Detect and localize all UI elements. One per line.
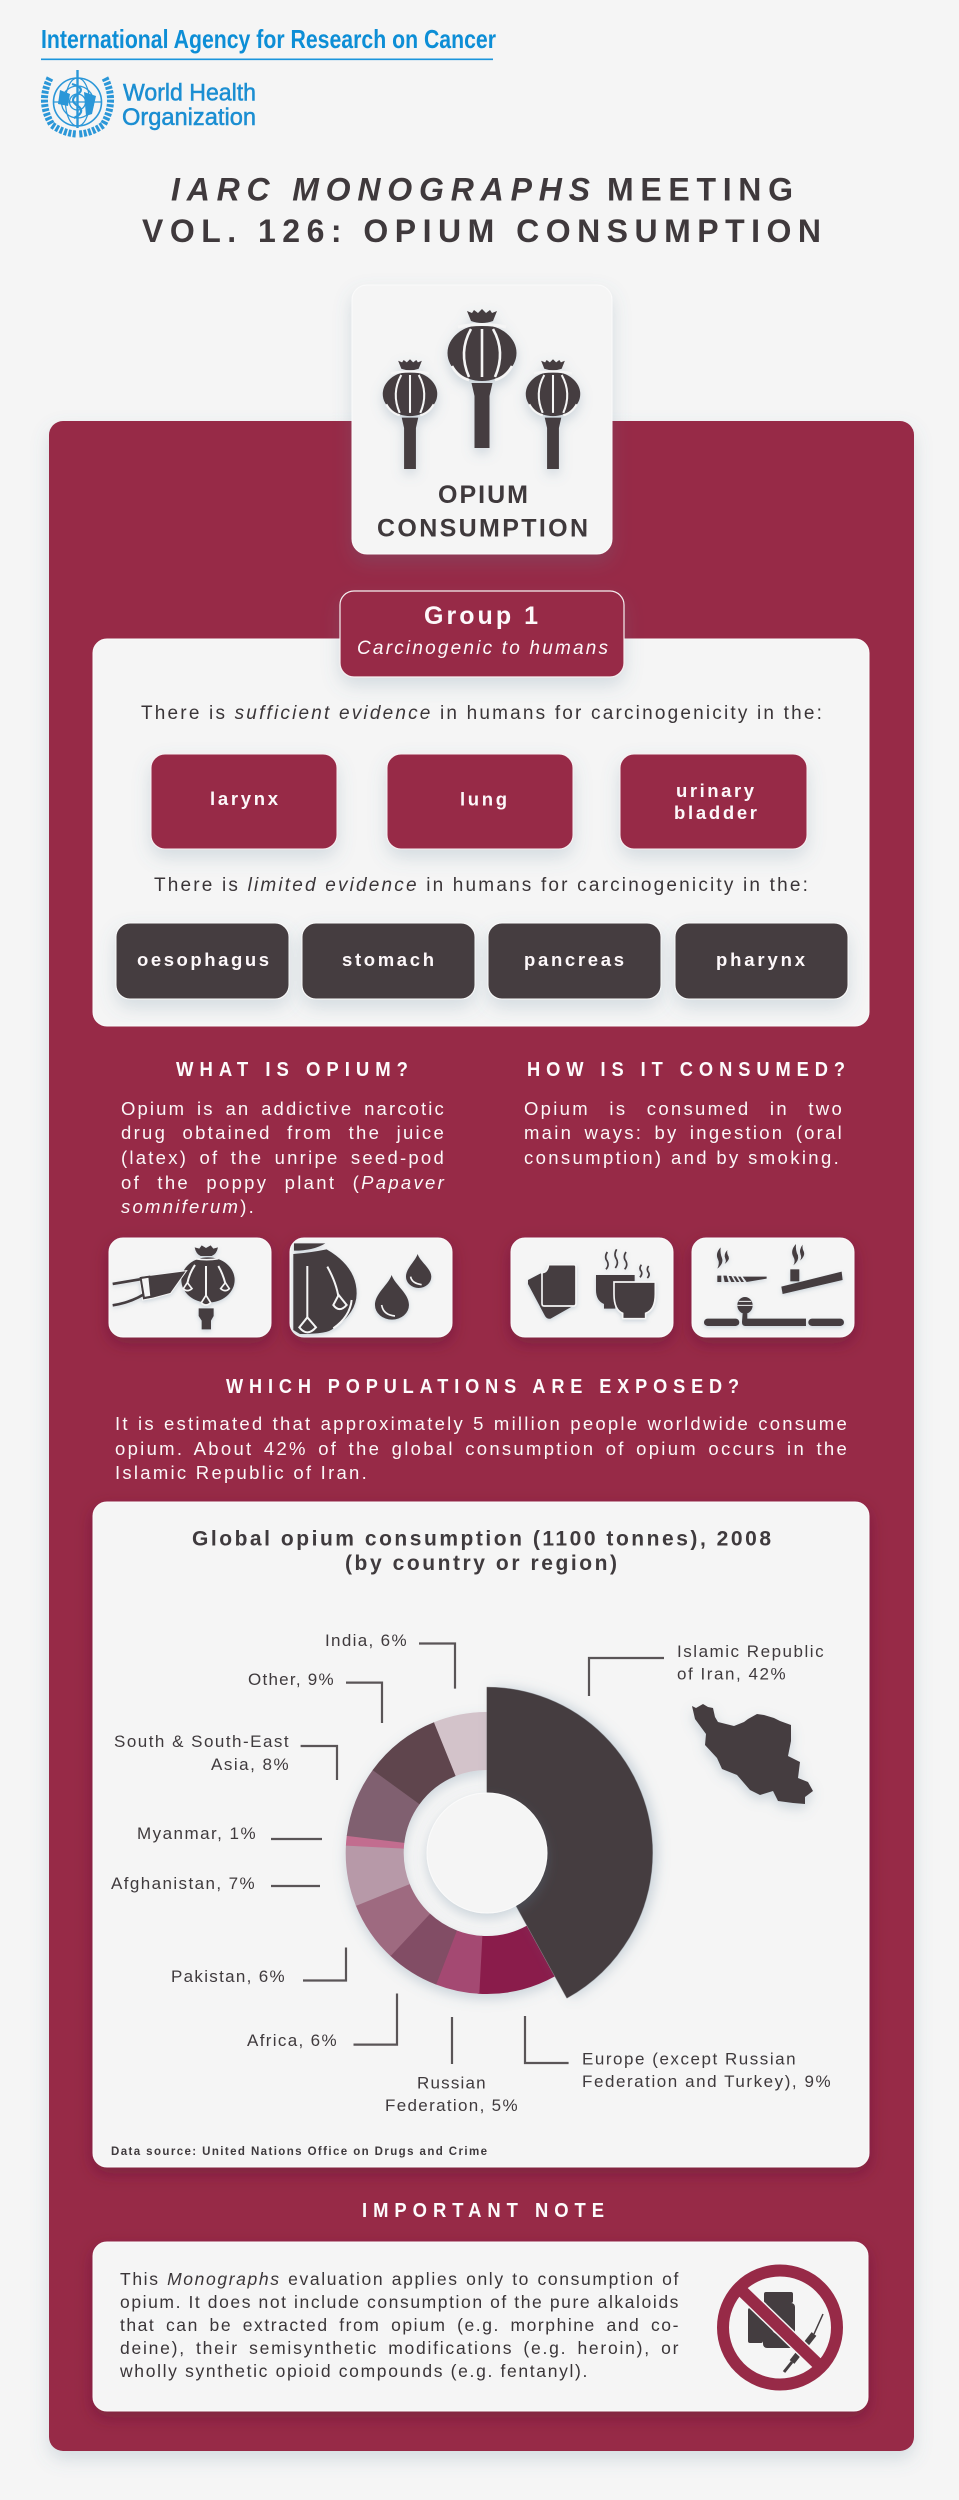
text: how is it consumed <box>524 1098 844 1168</box>
icon: no drugs sign <box>723 2270 837 2384</box>
chart title: (by country or region) <box>345 1552 617 1575</box>
text: populations exposed: It is estimated that approximately 5 million people worldwide consume <box>115 1413 849 1434</box>
text: how is it consumed: main ways: by ingestion (oral <box>524 1122 844 1143</box>
logo: World Health Organization: World Health <box>123 80 256 107</box>
text: what is opium: (latex) of the unripe seed-pod <box>121 1147 446 1168</box>
heading: which populations are exposed: WHICH POPULATIONS ARE EXPOSED? <box>226 1376 745 1398</box>
chart labels: Federation and Turkey), 9% <box>582 2072 832 2091</box>
badge: Group 1 <box>340 591 624 677</box>
panel: important note <box>93 2242 868 2411</box>
card label: CONSUMPTION <box>377 514 588 542</box>
box: lung <box>387 754 573 849</box>
text: populations exposed: Islamic Republic of Iran. <box>115 1462 369 1483</box>
box: larynx: larynx <box>210 788 279 809</box>
box: pancreas <box>488 923 661 999</box>
chart labels: Islamic Republic <box>677 1642 825 1661</box>
chart labels: Pakistan, 6% <box>171 1967 286 1986</box>
icon: poppy pods <box>383 309 580 469</box>
leader lines <box>271 1644 664 2064</box>
note text <box>119 2269 680 2381</box>
chart title: Global opium consumption (1100 tonnes), 2008 <box>192 1528 771 1550</box>
box: stomach: stomach <box>342 949 434 970</box>
chart labels: Federation, 5% <box>385 2096 519 2115</box>
title: MEETING <box>607 172 793 208</box>
box: larynx <box>151 754 337 849</box>
chart labels: of Iran, 42% <box>677 1664 787 1684</box>
panel: donut chart card <box>93 1502 869 2167</box>
text: what is opium: of the poppy plant (Papaver <box>121 1172 446 1193</box>
text: what is opium: Opium is an addictive narcotic <box>121 1098 446 1119</box>
note text: This Monographs evaluation applies only to consumption of <box>120 2269 680 2289</box>
heading: how is it consumed: HOW IS IT CONSUMED? <box>527 1059 851 1081</box>
note text: opium. It does not include consumption of the pure alkaloids <box>120 2292 680 2312</box>
icon card: smoking opium <box>692 1238 854 1337</box>
chart labels: India, 6% <box>325 1631 408 1650</box>
text: what is opium: somniferum). <box>121 1196 256 1217</box>
card label <box>377 481 588 542</box>
box: pharynx <box>675 923 848 999</box>
logo: World Health Organization: Organization <box>122 104 256 131</box>
chart title <box>192 1528 771 1575</box>
icon: map of Iran <box>692 1704 813 1804</box>
text: populations exposed <box>115 1413 849 1483</box>
text: populations exposed: opium. About 42% of the global consumption of opium occurs in the <box>115 1438 849 1459</box>
logo: International Agency for Research on Cancer: International Agency for Research on Cancer <box>41 24 496 54</box>
chart labels: Other, 9% <box>248 1670 335 1689</box>
chart labels: Asia, 8% <box>211 1755 290 1774</box>
heading: what is opium: WHAT IS OPIUM? <box>176 1059 414 1081</box>
text: what is opium: drug obtained from the juice <box>121 1122 446 1143</box>
icon: WHO emblem <box>44 70 111 134</box>
title: VOL. 126: OPIUM CONSUMPTION <box>142 213 821 249</box>
icon card: ingestion of opium <box>511 1238 673 1337</box>
panel: opium consumption icon card <box>352 285 612 554</box>
chart labels: Russian <box>417 2074 487 2092</box>
box: urinary bladder: bladder <box>674 802 757 823</box>
chart labels: Europe (except Russian <box>582 2050 797 2069</box>
box: lung: lung <box>460 788 507 810</box>
main red panel <box>49 421 914 2451</box>
note text: that can be extracted from opium (e.g. morphine and co- <box>120 2315 680 2335</box>
icon card: latex droplets <box>290 1238 452 1337</box>
note text: wholly synthetic opioid compounds (e.g. fentanyl). <box>119 2361 589 2381</box>
text: what is opium <box>121 1098 446 1217</box>
chart labels <box>111 1631 832 2115</box>
box: oesophagus: oesophagus <box>137 949 269 970</box>
chart labels: Myanmar, 1% <box>137 1824 257 1843</box>
box: urinary bladder <box>620 754 807 849</box>
chart labels: Africa, 6% <box>247 2031 338 2050</box>
text: how is it consumed: Opium is consumed in two <box>524 1098 844 1119</box>
data source: Data source: United Nations Office on Drugs and Crime <box>111 2146 487 2158</box>
box: oesophagus <box>116 923 289 999</box>
box: stomach <box>302 923 475 999</box>
title: IARC MONOGRAPHS <box>171 172 591 208</box>
text: how is it consumed: consumption) and by smoking. <box>524 1147 841 1168</box>
text: sufficient evidence: There is sufficient evidence in humans for carcinogenicity in the: <box>141 703 824 724</box>
card label: OPIUM <box>438 481 528 509</box>
title <box>142 172 821 249</box>
heading: important note: IMPORTANT NOTE <box>362 2200 610 2222</box>
logo: World Health Organization <box>44 70 256 134</box>
box: pharynx: pharynx <box>716 949 806 970</box>
note text: deine), their semisynthetic modifications (e.g. heroin), or <box>120 2338 680 2358</box>
badge: Group 1: Group 1 <box>424 602 538 630</box>
panel: carcinogenicity evidence <box>93 591 869 1026</box>
box: urinary bladder: urinary <box>676 780 755 801</box>
box: pancreas: pancreas <box>524 949 624 970</box>
text: limited evidence: There is limited evidence in humans for carcinogenicity in the: <box>154 875 810 896</box>
donut chart <box>328 1695 645 2011</box>
chart labels: Afghanistan, 7% <box>111 1874 256 1893</box>
badge: Group 1: Carcinogenic to humans <box>357 638 608 659</box>
chart labels: South & South-East <box>114 1732 290 1751</box>
icon card: lancing a poppy pod <box>109 1238 271 1337</box>
